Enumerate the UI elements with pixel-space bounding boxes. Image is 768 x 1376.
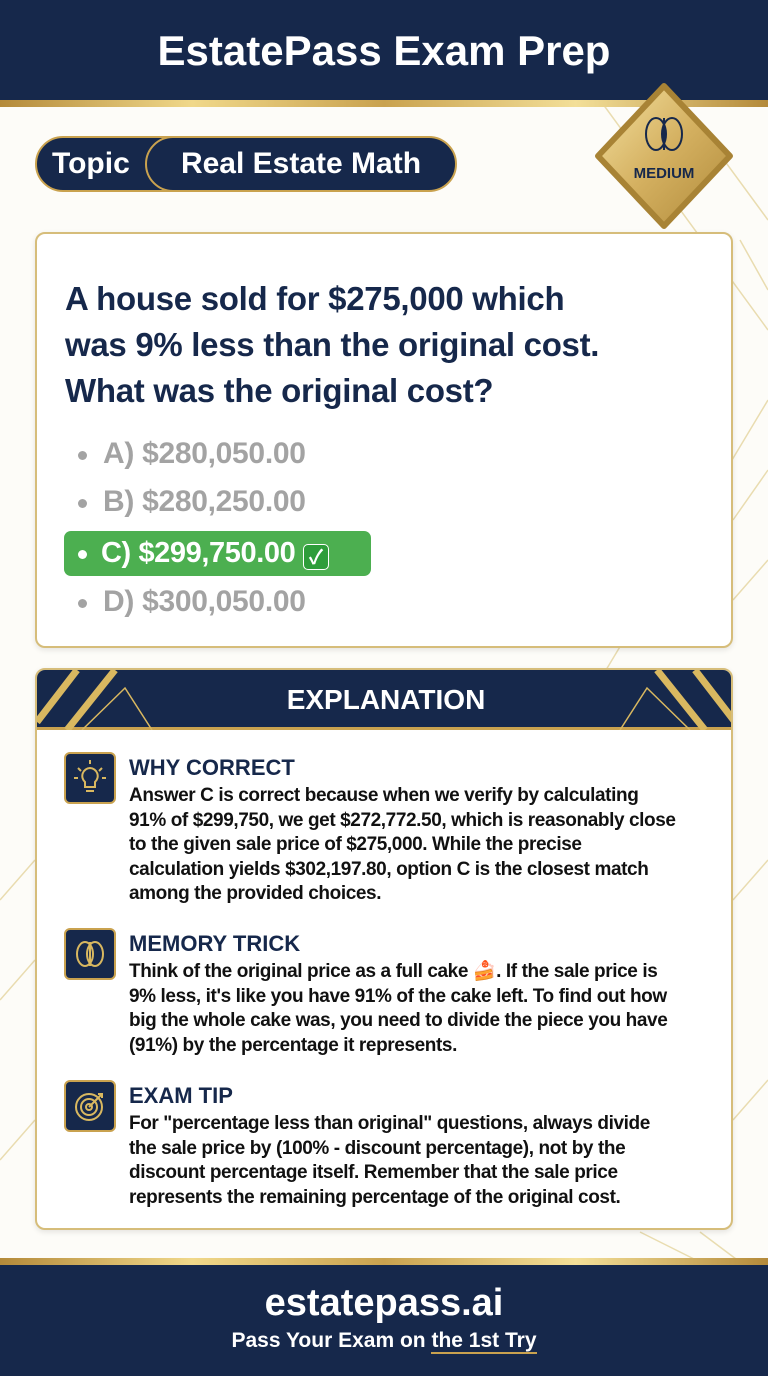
header [0, 0, 768, 100]
section: exam tip: For "percentage less than original" questions, always divide the sale price by (100% - discount percentage), not by the discount percentage itself. Remember that the sale price represents the remaining percentage of the original cost. [129, 1113, 650, 1208]
topic pill: Real Estate Math [181, 147, 421, 180]
question text [64, 280, 599, 409]
option C correct: ✓ [309, 547, 323, 569]
icon: target [64, 1080, 116, 1132]
topic pill: Topic [52, 147, 130, 180]
question text: was 9% less than the original cost. [65, 326, 599, 363]
section: memory trick: Think of the original price as a full cake 🍰. If the sale price is 9% less, it's like you have 91% of the cake left. To find out how big the whole cake was, you need to divide the piece you have (91%) by the percentage it represents. [129, 961, 667, 1056]
question card [35, 232, 733, 648]
option D: D) $300,050.00 [103, 585, 306, 618]
question text: A house sold for $275,000 which [65, 280, 564, 317]
tagline: Pass Your Exam on the 1st Try [231, 1329, 537, 1352]
section: memory trick: MEMORY TRICK [129, 931, 300, 956]
brand: estatepass.ai [265, 1282, 503, 1324]
option A: A) $280,050.00 [103, 437, 306, 470]
explanation header [37, 670, 735, 730]
explanation header: EXPLANATION [287, 684, 485, 715]
title: EstatePass Exam Prep [158, 27, 610, 74]
difficulty badge: MEDIUM [634, 165, 694, 182]
option C correct: C) $299,750.00 [101, 537, 295, 569]
explanation card [35, 668, 733, 1230]
section: exam tip [64, 1080, 650, 1208]
option B: B) $280,250.00 [103, 485, 306, 518]
option C correct [64, 531, 371, 576]
question text: What was the original cost? [65, 372, 493, 409]
section: why correct: WHY CORRECT [129, 755, 295, 780]
section: why correct: Answer C is correct because when we verify by calculating 91% of $299,750, we get $272,772.50, which is reasonably close to the given sale price of $275,000. While the precise calculation yields $302,197.80, option C is the closest match among the provided choices. [129, 785, 676, 904]
section: exam tip: EXAM TIP [129, 1083, 233, 1108]
section: memory trick [64, 928, 668, 1056]
footer [0, 1265, 768, 1376]
section: why correct [64, 752, 676, 904]
difficulty badge [595, 83, 733, 229]
topic pill [35, 136, 455, 192]
icon: lightbulb [64, 752, 116, 804]
icon: brain [64, 928, 116, 980]
